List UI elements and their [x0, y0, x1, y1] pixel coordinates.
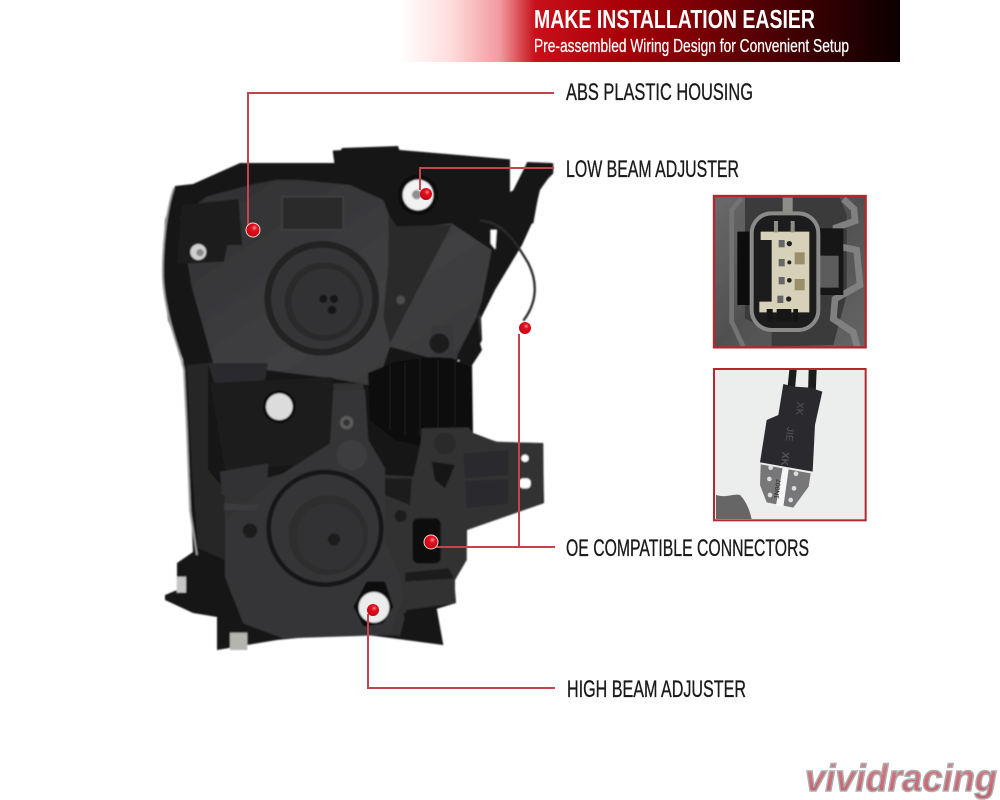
shrink tube [760, 384, 822, 472]
tube markings: XK [778, 451, 791, 467]
dark shadow region [737, 232, 753, 305]
top keys [774, 198, 795, 232]
panel border [714, 196, 866, 347]
inner cutout [432, 462, 455, 488]
inset: connector close-up [714, 196, 866, 347]
right strut [457, 255, 512, 368]
upper housing [177, 147, 553, 387]
label: OE COMPATIBLE CONNECTORS [566, 535, 809, 562]
nut [190, 244, 206, 260]
left housing frame [732, 198, 743, 347]
white gaps [453, 230, 497, 369]
watermark logo: vividracing [805, 758, 997, 800]
right housing frame [833, 199, 860, 347]
left margin strip [187, 363, 225, 560]
low beam adjuster [398, 175, 438, 215]
top dark recess [745, 198, 847, 347]
side latch [818, 228, 843, 295]
left bracket clip [177, 577, 186, 593]
black louvres [385, 478, 412, 505]
wire harness [480, 221, 535, 321]
tube markings: JIE [783, 426, 795, 442]
led dots [767, 465, 798, 502]
left lower ribs [220, 463, 268, 511]
upper vent hole [263, 390, 296, 423]
callout: low beam adjuster [420, 156, 739, 200]
lower foot [403, 608, 443, 645]
dark recess block [210, 377, 335, 470]
callout: oe compatible connectors [424, 322, 809, 562]
connector ledge [405, 568, 454, 582]
cream insert [759, 232, 809, 312]
high beam adjuster [353, 582, 393, 627]
label plate [282, 197, 343, 230]
wires [787, 370, 817, 393]
headlight silhouette [162, 146, 552, 650]
top rim [187, 165, 335, 200]
lower housing [177, 377, 543, 650]
small screw top [340, 416, 353, 429]
banner subtitle: Pre-assembled Wiring Design for Convenient Setup [534, 36, 849, 56]
callout: high beam adjuster [367, 604, 746, 703]
chrome left edge [163, 188, 197, 555]
small bolt [396, 296, 405, 304]
darker right panel [383, 213, 452, 343]
smudge [716, 495, 752, 519]
bottom keys [767, 309, 798, 322]
faint boss [337, 440, 367, 470]
central black ribbed frame [368, 357, 480, 450]
label: HIGH BEAM ADJUSTER [567, 676, 746, 703]
inset: led board close-up [714, 369, 866, 520]
center spine and cap panel [225, 390, 403, 638]
side screw [243, 523, 257, 538]
lower sealing cap [266, 470, 384, 587]
connector shell [752, 213, 818, 330]
small cap [429, 325, 453, 355]
header banner [400, 0, 900, 62]
right block [385, 427, 475, 608]
insert pins [777, 240, 805, 303]
rib lines [390, 358, 455, 435]
lower connector socket [413, 518, 441, 563]
right screw [395, 510, 407, 522]
callout: abs plastic housing [246, 79, 753, 237]
tube markings: XK [793, 401, 805, 416]
upper sealing cap [264, 241, 379, 356]
lower left rib [208, 363, 268, 385]
tube markings [778, 401, 805, 467]
white strip [776, 468, 789, 507]
housing panel [225, 383, 543, 638]
board text: 1N007 [773, 479, 783, 499]
round boss [434, 432, 456, 454]
housing panel [180, 178, 492, 387]
right mounting bracket [463, 450, 531, 508]
panel border [714, 369, 866, 520]
circuit board [760, 464, 811, 508]
headlight rear photo illustration [162, 146, 553, 650]
banner title: MAKE INSTALLATION EASIER [534, 4, 815, 34]
lower tab silver clip [230, 633, 247, 650]
black top bracket [333, 147, 553, 255]
label: LOW BEAM ADJUSTER [566, 156, 739, 183]
black block [177, 199, 242, 264]
label: ABS PLASTIC HOUSING [566, 79, 753, 106]
